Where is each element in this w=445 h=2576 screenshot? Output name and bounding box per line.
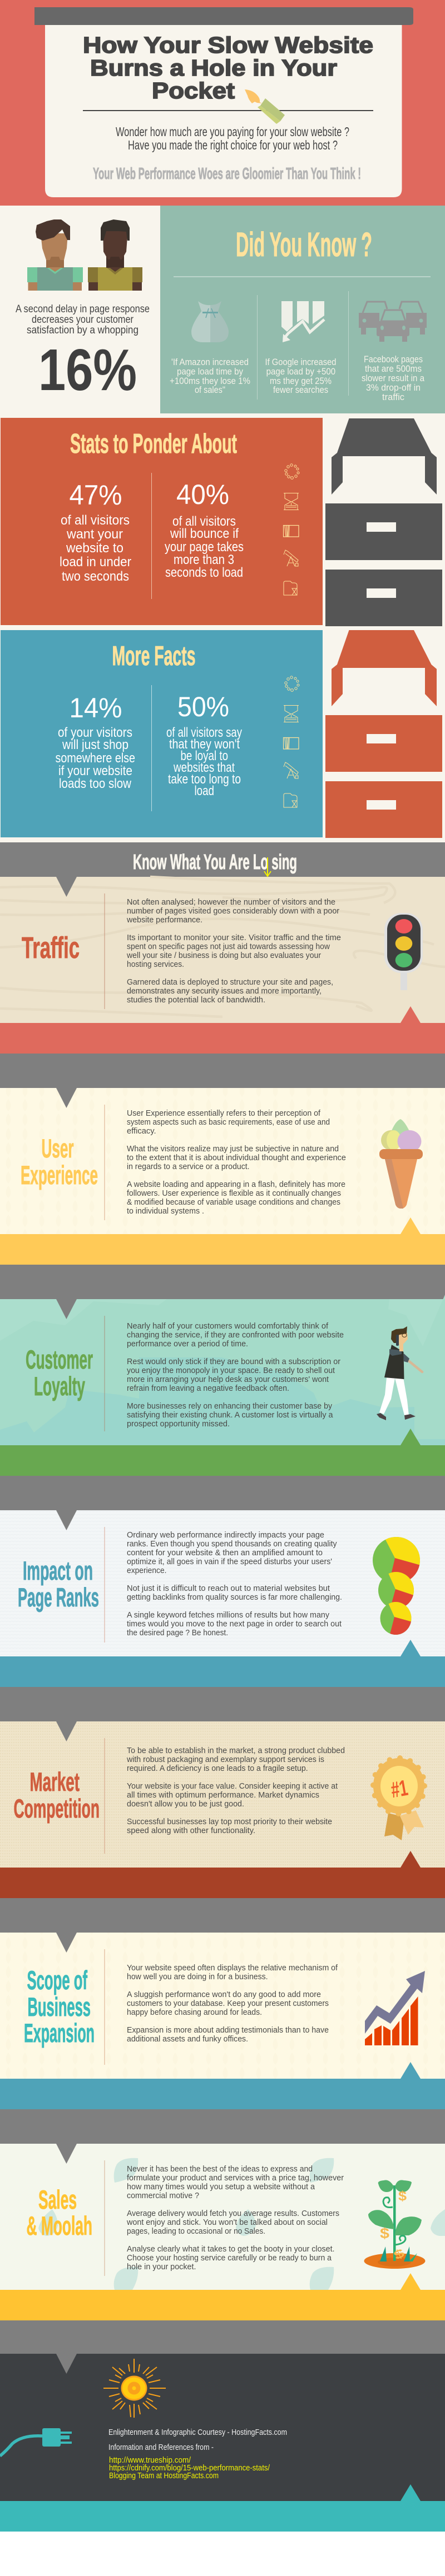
heading: Traffic [22, 931, 80, 965]
fact: amazon: 'If Amazon increased [171, 357, 249, 367]
body text: satisfying their existing chunk. A customer lost is virtually a [127, 1410, 333, 1420]
icon: cars [359, 302, 427, 342]
fact: amazon: page load time by [177, 366, 243, 377]
body text: Choose your hosting service carefully or be ready to burn a [127, 2253, 332, 2263]
stat 40%: seconds to load [165, 565, 243, 580]
heading: More Facts [112, 641, 196, 671]
stat 40%: more than 3 [174, 552, 234, 567]
icon: sun [103, 2359, 166, 2418]
icon: traffic light [384, 913, 423, 990]
body text: changing the service, if they are confronted with poor website [127, 1330, 344, 1340]
section header [0, 842, 445, 877]
heading: Page Ranks [18, 1582, 99, 1612]
body text: experience. [127, 1566, 167, 1575]
heading [18, 1556, 99, 1612]
body text: optimize it, all goes in vain if the speed disturbs your users' [127, 1557, 332, 1566]
header panel [0, 0, 445, 206]
body text: Nearly half of your customers would comfortably think of [127, 1321, 329, 1331]
stat 47%: of all visitors [61, 513, 130, 528]
body text [127, 1109, 346, 1216]
icon column [284, 676, 299, 807]
stat 14%: if your website [58, 763, 132, 778]
body text: ranks. Even though you spend thousands on creating quality [127, 1539, 337, 1549]
icon: man on phone [377, 1326, 422, 1420]
body text: additional assets and funky offices. [127, 2034, 248, 2044]
stat 50%: that they won't [169, 737, 240, 752]
heading [26, 1345, 93, 1401]
fact: amazon [170, 357, 250, 395]
delay text: decreases your customer [32, 314, 134, 326]
icon: money plant [364, 2180, 425, 2269]
heading [21, 1134, 98, 1190]
body text: Ordinary web performance indirectly impacts your page [127, 1530, 324, 1540]
stat 40%: your page takes [165, 540, 244, 555]
stat 50% [166, 691, 242, 798]
section: traffic [0, 842, 445, 1054]
body text: Analyse clearly what it takes to get the booty in your closet. [127, 2244, 335, 2254]
credits: Enlightenment & Infographic Courtesy - HostingFacts.com [108, 2428, 287, 2437]
body text: commercial motive ? [127, 2191, 199, 2200]
fact: google: If Google increased [265, 357, 336, 367]
stat 14%: 14% [69, 692, 122, 723]
fact: facebook: slower result in a [362, 373, 424, 383]
stat 50%: 50% [177, 691, 229, 722]
fact: amazon: +100ms they lose 1% [170, 376, 250, 386]
body text: prospect opportunity missed. [127, 1419, 230, 1429]
body text: how well you are doing in for a business. [127, 1972, 268, 1981]
big stat 16%: 16% [38, 337, 137, 403]
body text: Never it has been the best of the ideas to express and [127, 2164, 313, 2174]
heading [24, 1965, 95, 2048]
icon column [284, 464, 299, 595]
title: How Your Slow Website [83, 32, 373, 58]
heading: Market [30, 1767, 80, 1796]
section: user experience [0, 1054, 445, 1265]
cream background strip [0, 413, 445, 842]
body text: the desired page ? Be honest. [127, 1628, 228, 1638]
body text: A single keyword fetches millions of results but how many [127, 1610, 329, 1620]
title [83, 32, 373, 103]
heading: User [41, 1134, 73, 1163]
fact: amazon: of sales" [195, 385, 225, 395]
fact: facebook: that are 500ms [365, 363, 422, 374]
icon: money plant: $ [380, 2225, 390, 2241]
icon: man two [88, 219, 142, 291]
body text: studies the potential lack of bandwidth. [127, 995, 265, 1005]
heading: Impact on [23, 1556, 93, 1585]
stat 47%: website to [66, 541, 123, 556]
body text: Expansion is more about adding testimonials than to have [127, 2025, 329, 2035]
body text: times would you move to the next page in order to search out [127, 1619, 342, 1629]
heading: Expansion [24, 2018, 95, 2048]
body text: with robust packaging and exemplary support services is [126, 1755, 324, 1764]
stat 14%: will just shop [62, 737, 128, 752]
body text: User Experience essentially refers to their perception of [127, 1109, 321, 1118]
stat 50%: of all visitors say [166, 725, 242, 740]
fact: facebook: 3% drop-off in [366, 382, 421, 393]
title: Burns a Hole in Your [90, 55, 337, 81]
body text [126, 2164, 344, 2272]
credits: Information and References from - [108, 2443, 214, 2452]
credits [108, 2428, 287, 2452]
body text: Not often analysed; however the number of visitors and the [127, 897, 335, 907]
stat 47%: 47% [69, 480, 122, 511]
stat 40%: 40% [176, 479, 229, 510]
body text: demonstrates any security issues and more importantly, [127, 986, 322, 996]
body text: Average delivery would fetch you average results. Customers [127, 2209, 339, 2218]
stat 50%: load [195, 783, 214, 798]
panel: second delay [0, 206, 160, 418]
body text: Your website is your face value. Consider keeping it active at [127, 1781, 338, 1791]
icon: ice cream [379, 1119, 423, 1209]
references: Blogging Team at HostingFacts.com [109, 2471, 219, 2480]
body text [127, 1963, 338, 2044]
section: page ranks [0, 1476, 445, 1687]
body text: refrain from leaving a negative feedback often. [127, 1384, 289, 1393]
body text: Successful businesses lay top most priority to their website [127, 1817, 332, 1826]
title: Pocket [152, 78, 235, 103]
stat 50%: websites that [173, 760, 235, 775]
stat 47%: want your [66, 527, 123, 542]
stat 47% [60, 480, 131, 584]
body text [126, 1746, 345, 1835]
fact: google: ms they get 25% [270, 376, 332, 386]
body text: speed along with other functionality. [127, 1826, 255, 1835]
stat 14%: somewhere else [56, 751, 135, 766]
body text: more in arranging your help desk as your customers' wont [127, 1375, 329, 1384]
body text: content for your website & then an amplified amount to [127, 1548, 323, 1557]
subtitle questions: Have you made the right choice for your web host ? [128, 138, 338, 152]
body text: & modified because of variable usage conditions and changes [127, 1197, 340, 1207]
stat 14% [56, 692, 135, 791]
icon: number one badge: #1 [389, 1776, 410, 1803]
pocket card [45, 25, 402, 197]
body text: customers to your database. Keep your present customers [127, 1999, 329, 2008]
body text: how many times would you setup a website without a [127, 2182, 315, 2191]
heading: & Moolah [27, 2211, 92, 2240]
icon: red pocket [325, 630, 442, 838]
heading: Stats to Ponder About [70, 429, 237, 459]
arrow [264, 857, 271, 876]
heading: Business [28, 1992, 91, 2021]
body text: To be able to establish in the market, a strong product clubbed [127, 1746, 345, 1755]
body text: doesn't allow you to be just good. [127, 1799, 244, 1809]
body text: website performance. [126, 915, 202, 925]
body text: to the extent that it is about individual thought and experience [127, 1153, 346, 1162]
stat 50%: take too long to [168, 772, 241, 787]
fact: facebook: traffic [382, 392, 404, 402]
stat 40%: will bounce if [170, 526, 239, 541]
stat 47%: two seconds [62, 569, 129, 584]
body text: formulate your product and services with a price tag, however [127, 2173, 344, 2183]
body text: spent on specific pages not just aid towards assessing how [127, 942, 330, 951]
heading: Customer [26, 1345, 93, 1374]
heading: Scope of [27, 1965, 87, 1995]
subtitle questions: Wonder how much are you paying for your slow website ? [116, 124, 349, 139]
icon: power plug [0, 2428, 72, 2456]
body text: all times with optimum performance. Market dynamics [127, 1790, 319, 1800]
fact: facebook [362, 354, 424, 402]
section: sales and moolah [0, 2109, 445, 2320]
body text: Rest would only stick if they are bound with a subscription or [127, 1357, 340, 1366]
icon: grey pocket [325, 418, 442, 626]
body text: happy before chasing around for leads. [127, 2008, 262, 2017]
body text [126, 897, 341, 1005]
panel: did you know [160, 206, 445, 413]
heading [27, 2185, 92, 2240]
stat 47%: load in under [60, 555, 131, 570]
fact: google: page load by +500 [266, 366, 335, 377]
decorative leaves [38, 2158, 445, 2290]
heading: Experience [21, 1160, 98, 1190]
section: customer loyalty [0, 1265, 445, 1476]
body text: system aspects such as basic requirements, ease of use and [127, 1117, 330, 1127]
body text: More businesses rely on enhancing their customer base by [127, 1401, 332, 1411]
heading [13, 1767, 100, 1823]
references [109, 2455, 270, 2480]
stat 14%: of your visitors [58, 725, 132, 740]
body text: followers. User experience is flexible as it continually changes [127, 1189, 341, 1198]
body text: getting backlinks from quality sources is far more challenging. [127, 1592, 342, 1602]
body text: pages, leading to occasional or no Sales. [127, 2226, 265, 2236]
panel: more facts [1, 630, 323, 837]
delay text [16, 303, 150, 336]
body text [127, 1321, 344, 1429]
body text: hosting services. [127, 960, 184, 969]
body text: Garnered data is deployed to structure your site and pages, [127, 977, 333, 987]
icon: stacked pie charts [373, 1537, 420, 1635]
body text: What the visitors realize may just be subjective in nature and [127, 1144, 339, 1154]
stat 40%: of all visitors [172, 514, 236, 529]
section header: Know What You Are Lo sing [133, 851, 297, 874]
fact: google: fewer searches [273, 385, 328, 395]
body text: A website loading and appearing in a flash, definitely has more [127, 1180, 345, 1189]
icon: man one [27, 219, 83, 291]
heading: Sales [38, 2185, 77, 2214]
section: business expansion [0, 1898, 445, 2109]
body text: hole in your pocket. [127, 2262, 196, 2272]
body text: required. A deficiency is one leads to a fragile setup. [127, 1764, 308, 1773]
icon: growth chart [365, 1971, 425, 2045]
body text: wont enjoy and stick. You won't be talked about on social [126, 2218, 328, 2227]
body text: A sluggish performance won't do any good to add more [127, 1990, 321, 1999]
panel: stats to ponder [1, 418, 323, 625]
subtitle questions [116, 124, 349, 152]
body text [127, 1530, 342, 1638]
body text: to individual systems . [127, 1206, 204, 1216]
icon: falling chart [281, 301, 324, 342]
body text: efficacy. [127, 1126, 156, 1136]
references: https://cdnify.com/blog/15-web-performance-stats/ [109, 2463, 270, 2473]
body text: Your website speed often displays the relative mechanism of [127, 1963, 338, 1973]
fact: facebook: Facebook pages [364, 354, 423, 365]
delay text: A second delay in page response [16, 303, 150, 315]
section: market competition [0, 1687, 445, 1898]
body text: Not just it is difficult to reach out to material websites but [127, 1584, 330, 1593]
heading: Loyalty [34, 1371, 85, 1401]
icon: money plant: $ [398, 2189, 407, 2204]
icon: burning match [245, 89, 285, 124]
panel: footer [0, 2320, 445, 2532]
icon: money bag [191, 301, 229, 342]
heading: Competition [13, 1794, 100, 1823]
stat 14%: loads too slow [59, 776, 132, 791]
body text: number of pages visited goes considerably down with a poor [127, 906, 339, 916]
stat 40% [165, 479, 244, 580]
icon: number one badge [373, 1758, 424, 1840]
references: http://www.trueship.com/ [109, 2455, 191, 2465]
body text: performance over a period of time. [127, 1339, 248, 1349]
body text: you enjoy the monopoly in your space. Be ready to shell out [127, 1366, 335, 1375]
body text: well your site / business is doing but also evaluates your [126, 951, 321, 960]
fact: google [265, 357, 336, 395]
stat 50%: be loyal to [180, 748, 228, 763]
body text: in regards to a service or a product. [127, 1162, 249, 1171]
pocket top bar [34, 7, 413, 25]
icon: money plant: $ [392, 2246, 407, 2263]
body text: Its important to monitor your site. Visitor traffic and the time [127, 933, 341, 942]
delay text: satisfaction by a whopping [27, 325, 139, 336]
